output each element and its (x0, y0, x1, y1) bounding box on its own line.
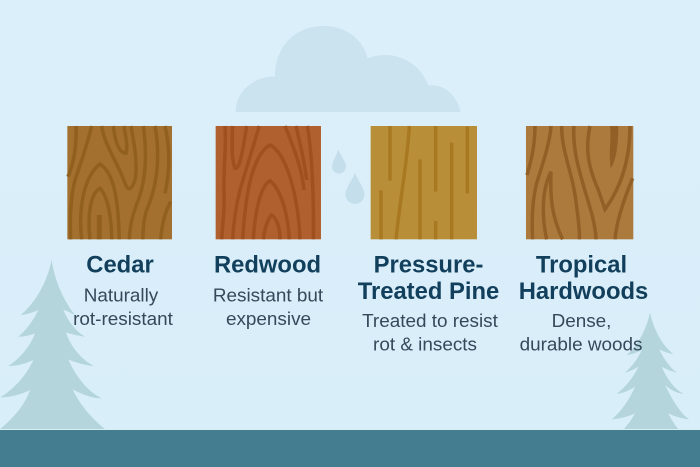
description: cedar (73, 286, 174, 330)
description: pressure-treated pine: rot & insects (373, 334, 477, 356)
icon: large water drop (346, 172, 364, 204)
icon: left pine tree (0, 260, 105, 429)
cedar wood swatch (67, 126, 172, 239)
description: pressure-treated pine (362, 311, 499, 356)
panel: tropical hardwoods (519, 126, 648, 356)
heading: redwood: Redwood (214, 252, 321, 278)
heading: tropical hardwoods (519, 252, 648, 305)
panel: pressure-treated pine (358, 126, 499, 356)
hardwood wood swatch (526, 126, 633, 239)
description: cedar: rot-resistant (73, 309, 174, 330)
panel: redwood (213, 126, 324, 330)
heading: pressure-treated pine (358, 252, 499, 305)
description: cedar: Naturally (84, 286, 159, 306)
redwood wood swatch (216, 126, 321, 239)
icon: right pine tree (612, 312, 689, 429)
description: tropical hardwoods: Dense, (552, 311, 611, 332)
ground band (0, 430, 700, 467)
icon: rain cloud (236, 26, 461, 112)
heading: tropical hardwoods: Tropical (536, 252, 627, 278)
pine wood swatch (371, 126, 477, 239)
icon: small water drop (332, 150, 346, 174)
description: pressure-treated pine: Treated to resist (362, 311, 499, 332)
panel: cedar (67, 126, 174, 330)
description: redwood: expensive (226, 309, 311, 330)
description: redwood: Resistant but (213, 286, 324, 306)
heading: cedar: Cedar (86, 252, 154, 278)
description: redwood (213, 286, 324, 330)
description: tropical hardwoods (520, 311, 642, 356)
heading: tropical hardwoods: Hardwoods (519, 278, 648, 305)
description: tropical hardwoods: durable woods (520, 334, 642, 356)
heading: pressure-treated pine: Pressure- (374, 252, 483, 278)
heading: pressure-treated pine: Treated Pine (358, 278, 499, 305)
